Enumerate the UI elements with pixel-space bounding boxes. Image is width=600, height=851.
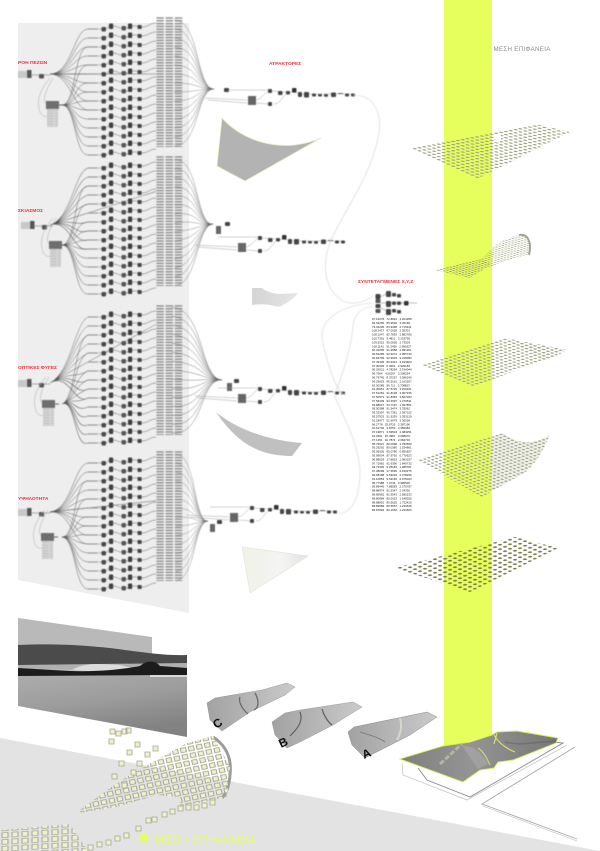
coordinates table: 95.29021 4.78254 2.194044 (372, 368, 412, 372)
landscape section image (18, 618, 187, 737)
coordinates table: 91.0291 87.4987 3.098670 (372, 434, 410, 438)
coordinates table: 100.7391 9.4812 3.233795 (372, 336, 410, 340)
coordinates table: 97.51281 91.8128 3.007335 (372, 391, 412, 395)
legend: ΜΕΣΗ ΕΠΙΦΑΝΕΙΑ: ΜΕΣΗ ΕΠΙΦΑΝΕΙΑ (155, 834, 257, 846)
mini surface C: C (210, 715, 225, 732)
coordinates table: 97.16278 72.8812 3.204288 (372, 317, 412, 321)
coordinates table: 92.30285 86.711 2.708823 (372, 383, 410, 387)
mini surface A: A (360, 745, 373, 762)
coordinates table: 96.2778 52.8725 2.387190 (372, 422, 410, 426)
coordinates table: 88.88891 80.5625 1.732420 (372, 500, 412, 504)
coordinates table: 88.88974 81.6347 2.34330 (372, 489, 410, 493)
coordinates table: 108.3417 97.0028 2.35301 (372, 329, 410, 333)
mini surface A (348, 712, 437, 762)
attractor surface 3 (216, 412, 302, 456)
coordinates table: 93.29653 86.5191 2.163257 (372, 379, 412, 383)
coordinates table: 79.34205 83.9338 2.715911 (372, 325, 412, 329)
point cloud 1 (410, 124, 570, 179)
coordinates table: 96.7964 4.50197 3.208254 (372, 372, 410, 376)
mini surface B: B (276, 734, 290, 751)
coordinates table: 95.77388 7.0736 2.995530 (372, 481, 410, 485)
attractor chain 3 (195, 379, 345, 404)
graph block 4 (18, 450, 208, 592)
attractor surface 2 (252, 288, 298, 307)
coordinates table: 97.19871 3.59534 2.084251 (372, 430, 412, 434)
heading: ΡΟΗ ΠΕΖΩΝ: ΡΟΗ ΠΕΖΩΝ (18, 60, 48, 66)
coordinates table: 93.32397 90.7381 2.937152 (372, 411, 412, 415)
coordinates table: 99.00388 91.5474 3.33562 (372, 407, 410, 411)
heading: ΜΕΣΗ ΕΠΙΦΑΝΕΙΑ top: ΜΕΣΗ ΕΠΙΦΑΝΕΙΑ (494, 46, 551, 53)
coordinates table: 89.89445 7.88583 2.375787 (372, 485, 412, 489)
coordinates table: 89.80884 80.0023 1.548255 (372, 496, 412, 500)
coordinates table: 93.29292 80.0380 1.534861 (372, 446, 412, 450)
point cloud 3 (421, 338, 568, 387)
coordinates table: 97.1351 91.7874 2.084730 (372, 438, 410, 442)
heading: ΣΚΙΑΣΜΟΣ: ΣΚΙΑΣΜΟΣ (18, 208, 43, 214)
coordinates table: 96.88929 17.8823 1.083197 (372, 457, 412, 461)
yellow column (444, 0, 492, 748)
main surface (400, 731, 558, 782)
site plan outline (402, 742, 577, 841)
point cloud 5 (395, 537, 558, 592)
attractor chain 2 (195, 222, 345, 253)
legend: yellow dot (140, 834, 148, 842)
graph block 1 (18, 16, 214, 158)
point cloud: square markers (0, 728, 230, 851)
attractor chain 1 (205, 88, 355, 106)
coordinates table: 97.50571 91.8353 3.567283 (372, 395, 412, 399)
coordinates table: 99.52285 90.9272 2.995733 (372, 352, 412, 356)
coordinates table: 96.79745 8.37257 3.586240 (372, 376, 412, 380)
coordinates table: 99.08398 9.53229 2.378295 (372, 473, 412, 477)
coordinates table: 97.71981 91.6390 1.840732 (372, 461, 412, 465)
heading: ΣΥΝΤΕΤΑΓΜΕΝΕΣ X,Y,Z: ΣΥΝΤΕΤΑΓΜΕΝΕΣ X,Y,Z (358, 279, 413, 285)
graph block 2 (21, 147, 213, 296)
coordinates merge nodes (376, 291, 417, 315)
attractor chain 4 (187, 505, 337, 532)
attractor surface 1 (217, 118, 321, 181)
coordinates table: 109.5315 90.0595 2.73503 (372, 340, 410, 344)
node graphs (18, 16, 417, 592)
coordinates table: 91.61792 3.8753 3.350983 (372, 426, 410, 430)
coordinates table: 90.32265 91.9688 2.991201 (372, 348, 412, 352)
coordinates table: 91.18977 51.6979 3.30528 (372, 418, 410, 422)
coordinates table: 89.85981 81.5543 2.585233 (372, 492, 412, 496)
coordinates table: 97.38699 17.5595 2.340275 (372, 469, 412, 473)
coordinates table: 95.79021 80.0098 1.783590 (372, 442, 412, 446)
coordinates table: 91.30951 87.5720 3.206331 (372, 387, 412, 391)
coordinates table: 95.99034 87.9792 0.778523 (372, 454, 412, 458)
attractor surface 4 (242, 547, 308, 593)
coordinates table: 90.84705 92.9003 3.318083 (372, 356, 412, 360)
coordinates table: 93.72345 9.25183 1.085781 (372, 465, 412, 469)
coordinates table: 91.10853 9.52165 2.975023 (372, 477, 412, 481)
panel: grey definition panel (18, 23, 189, 613)
coordinates table: 108.1047 82.7893 2.882785 (372, 333, 412, 337)
coordinates table: 97.30945 6.3691 2.949184 (372, 364, 410, 368)
mini surface C (207, 683, 295, 732)
coordinates table: 86.87894 80.1062 1.234600 (372, 508, 412, 512)
coordinates table: 93.88647 93.7197 1.397851 (372, 403, 412, 407)
connector curves (322, 95, 380, 514)
coordinates table: 93.63255 85.9530 3.35196 (372, 321, 410, 325)
coordinates table: 108.1142 91.5490 2.991827 (372, 344, 412, 348)
point cloud 4 (417, 433, 550, 497)
coordinates table: 88.89989 80.5557 1.233635 (372, 504, 412, 508)
coordinates table (372, 317, 412, 512)
coordinates table: 97.56309 93.3097 1.379531 (372, 399, 412, 403)
floor panel (0, 738, 600, 851)
heading: ΑΤΡΑΚΤΟΡΕΣ: ΑΤΡΑΚΤΟΡΕΣ (269, 61, 301, 67)
coordinates table: 93.09326 85.0780 0.850657 (372, 450, 412, 454)
heading: ΥΨΗΛΟΤΗΤΑ: ΥΨΗΛΟΤΗΤΑ (18, 496, 49, 502)
point cloud 2 (435, 235, 530, 278)
coordinates table: 93.57923 51.9293 3.353129 (372, 414, 412, 418)
graph block 3 (18, 279, 222, 454)
heading: ΟΠΤΙΚΕΣ ΦΥΓΕΣ: ΟΠΤΙΚΕΣ ΦΥΓΕΣ (18, 365, 57, 371)
mini surface B (272, 702, 362, 751)
coordinates table: 97.49435 80.9321 3.193903 (372, 360, 412, 364)
